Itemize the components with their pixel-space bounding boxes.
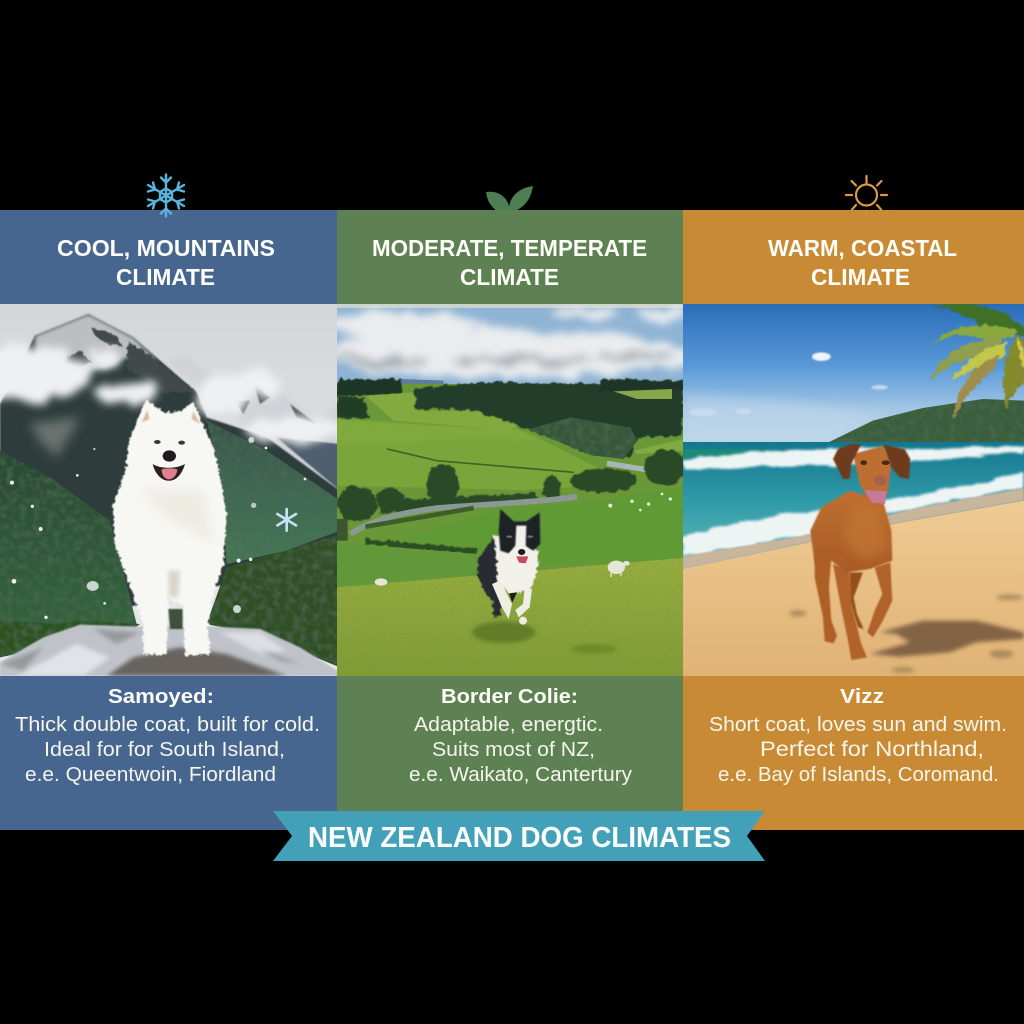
icon: sun [846, 176, 887, 216]
breed text: border collie: e.e. Waikato, Cantertury [409, 764, 632, 786]
panel: cool mountains climate [0, 210, 343, 830]
breed text: vizsla: Vizz [840, 686, 884, 708]
sheep [375, 561, 630, 586]
breed text: border collie: Border Colie: [441, 686, 578, 708]
breed text: vizsla: e.e. Bay of Islands, Coromand. [718, 764, 999, 786]
header band: warm [683, 210, 1024, 304]
photo: samoyed on a snowy mountain [0, 304, 343, 676]
heading: warm, coastal climate [768, 235, 957, 290]
heading: moderate, temperate climate: CLIMATE [460, 264, 559, 290]
breed text: vizsla: Perfect for Northland, [760, 737, 984, 761]
clouds [337, 304, 683, 308]
title ribbon [273, 811, 765, 861]
photo: vizsla on a sunny beach [683, 304, 1024, 676]
breed text: vizsla: Short coat, loves sun and swim. [709, 714, 1007, 736]
breed text: samoyed: Ideal for for South Island, [44, 739, 285, 761]
panel: warm coastal climate [683, 210, 1024, 830]
species panel: warm [683, 676, 1024, 830]
heading: warm, coastal climate: WARM, COASTAL [768, 235, 957, 261]
breed text: border collie [409, 686, 632, 786]
heading: moderate, temperate climate [372, 235, 647, 290]
vizsla dog [810, 444, 910, 660]
river [350, 497, 577, 534]
breed text: vizsla [709, 686, 1007, 786]
photo: border collie on green farmland [337, 304, 683, 676]
heading: warm, coastal climate: CLIMATE [811, 264, 910, 290]
rock [0, 625, 340, 676]
species panel: cool [0, 676, 337, 830]
breed text: border collie: Adaptable, energtic. [414, 714, 603, 736]
small snowflake in scene [277, 509, 296, 531]
breed text: samoyed: Thick double coat, built for cold. [15, 714, 320, 736]
breed text: samoyed [15, 686, 320, 786]
sheep on hill [608, 493, 672, 511]
icon: snowflake [148, 174, 184, 216]
tree clusters [337, 449, 686, 522]
ribbon shape [273, 811, 765, 861]
heading: moderate, temperate climate: MODERATE, TEMPERATE [372, 235, 647, 261]
snow specks [10, 437, 306, 619]
breed text: border collie: Suits most of NZ, [432, 739, 595, 761]
surf [683, 447, 1024, 556]
title: NEW ZEALAND DOG CLIMATES [308, 822, 731, 854]
palm tree [930, 304, 1024, 421]
breed text: samoyed: Samoyed: [108, 686, 214, 708]
species panel: moderate [337, 676, 683, 811]
header band: cool [0, 210, 337, 304]
heading: cool, mountains climate [57, 235, 275, 290]
heading: cool, mountains climate: CLIMATE [116, 264, 215, 290]
heading: cool, mountains climate: COOL, MOUNTAINS [57, 235, 275, 261]
samoyed dog [113, 399, 227, 656]
panel: moderate temperate climate [337, 210, 683, 811]
breed text: samoyed: e.e. Queentwoin, Fiordland [25, 764, 276, 786]
clouds [0, 346, 343, 442]
icon: green leaves [486, 186, 533, 211]
header band: moderate [337, 210, 683, 304]
border collie dog [477, 509, 540, 625]
shadow [870, 621, 1024, 657]
